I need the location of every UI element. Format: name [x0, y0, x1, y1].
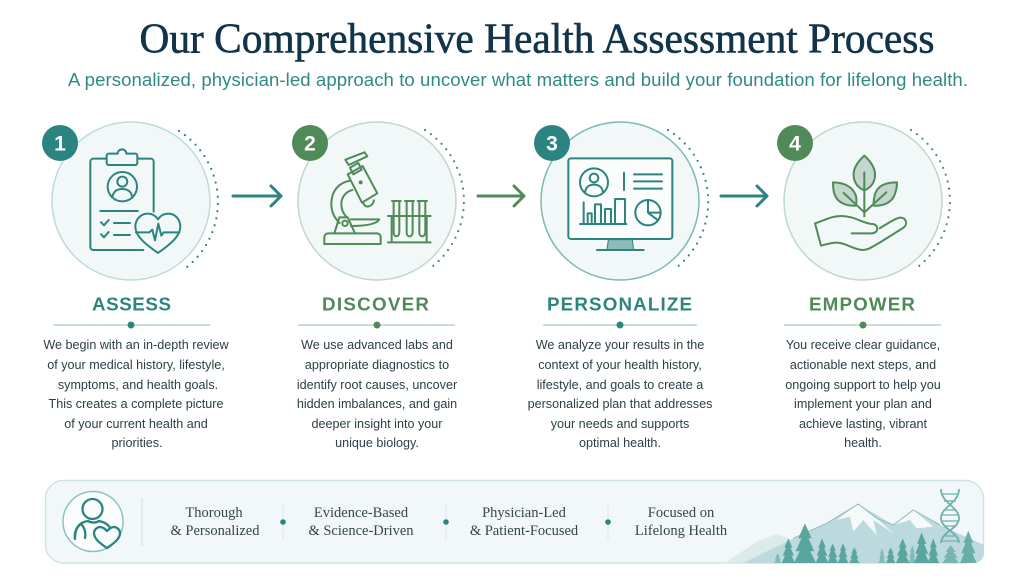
benefit 3 [470, 505, 579, 539]
dotted arc 1 [179, 131, 218, 267]
badge 4 [777, 125, 813, 161]
step 2: discover [292, 122, 464, 450]
dotted arc 2 [425, 130, 464, 266]
badge 1: 1 [54, 132, 66, 156]
banner panel [46, 480, 984, 563]
subtitle: A personalized, physician-led approach to uncover what matters and build your foundation for lifelong health. [68, 69, 968, 90]
mountains and trees [725, 504, 984, 563]
text empower: implement your plan and [794, 397, 932, 411]
text personalize: personalized plan that addresses [528, 397, 712, 411]
benefit 3: & Patient-Focused [470, 523, 579, 539]
text assess: priorities. [111, 436, 163, 450]
step 1: assess [42, 122, 230, 450]
circle 1 [52, 122, 210, 280]
text personalize: optimal health. [579, 436, 661, 450]
text discover: appropriate diagnostics to [305, 358, 449, 372]
text discover: deeper insight into your [312, 417, 442, 431]
benefit 2 [308, 505, 414, 539]
text discover: hidden imbalances, and gain [297, 397, 457, 411]
text discover: We use advanced labs and [301, 338, 453, 352]
badge 3: 3 [546, 132, 558, 156]
benefit 4 [635, 505, 728, 539]
dotted arc 3 [668, 130, 708, 267]
heading discover: DISCOVER [322, 294, 429, 315]
divider 4 [784, 322, 941, 328]
arrow 1 [233, 186, 281, 206]
text personalize: We analyze your results in the [536, 338, 704, 352]
text personalize: your needs and supports [551, 417, 689, 431]
text assess: symptoms, and health goals. [58, 378, 218, 392]
text discover: unique biology. [335, 436, 419, 450]
benefit 1: & Personalized [170, 523, 260, 539]
text empower: health. [844, 436, 882, 450]
separator dot 3 [605, 505, 611, 540]
badge 1 [42, 125, 78, 161]
text personalize: lifestyle, and goals to create a [537, 378, 703, 392]
divider 1 [53, 322, 210, 328]
divider 3 [543, 322, 697, 328]
text assess [43, 338, 230, 450]
text assess: of your medical history, lifestyle, [47, 358, 225, 372]
benefit 2: & Science-Driven [308, 523, 414, 539]
bottom banner [46, 480, 984, 563]
separator dot 1 [280, 505, 286, 540]
icon: hand holding seedling [815, 156, 906, 250]
icon: dna helix [941, 489, 959, 543]
circle 2 [298, 122, 456, 280]
benefit 1 [170, 505, 260, 539]
text assess: This creates a complete picture [48, 397, 224, 411]
divider 2 [298, 322, 455, 328]
badge 4: 4 [789, 132, 801, 156]
title: Our Comprehensive Health Assessment Process [140, 16, 934, 62]
divider line [141, 498, 143, 546]
circle 4 [784, 122, 942, 280]
benefit 2: Evidence-Based [314, 505, 409, 521]
badge 3 [534, 125, 570, 161]
benefit 1: Thorough [185, 505, 243, 521]
heading assess: ASSESS [92, 294, 171, 315]
badge 2 [292, 125, 328, 161]
text empower: You receive clear guidance, [786, 338, 940, 352]
arrow 3 [721, 186, 767, 206]
separator dot 2 [443, 505, 449, 540]
icon: clipboard with heart [90, 149, 180, 253]
badge 2: 2 [304, 132, 316, 156]
icon: doctor with heart [63, 492, 123, 552]
step 3: personalize [528, 122, 712, 450]
benefit 4: Lifelong Health [635, 523, 728, 539]
text assess: We begin with an in-depth review [43, 338, 230, 352]
text discover [297, 338, 457, 450]
text personalize [528, 338, 712, 450]
text discover: identify root causes, uncover [297, 378, 457, 392]
step 4: empower [777, 122, 950, 450]
arrow 2 [478, 186, 524, 206]
benefit 3: Physician-Led [482, 505, 567, 521]
text empower [785, 338, 941, 450]
benefit 4: Focused on [648, 505, 715, 521]
text empower: ongoing support to help you [785, 378, 941, 392]
icon: monitor dashboard [568, 158, 672, 250]
circle 3 [541, 122, 699, 280]
text assess: of your current health and [64, 417, 208, 431]
dotted arc 4 [911, 130, 950, 266]
icon: microscope and test tubes [324, 152, 431, 244]
text empower: actionable next steps, and [790, 358, 936, 372]
heading empower: EMPOWER [809, 294, 915, 315]
text empower: achieve lasting, vibrant [799, 417, 928, 431]
text personalize: context of your health history, [538, 358, 702, 372]
heading personalize: PERSONALIZE [547, 294, 692, 315]
